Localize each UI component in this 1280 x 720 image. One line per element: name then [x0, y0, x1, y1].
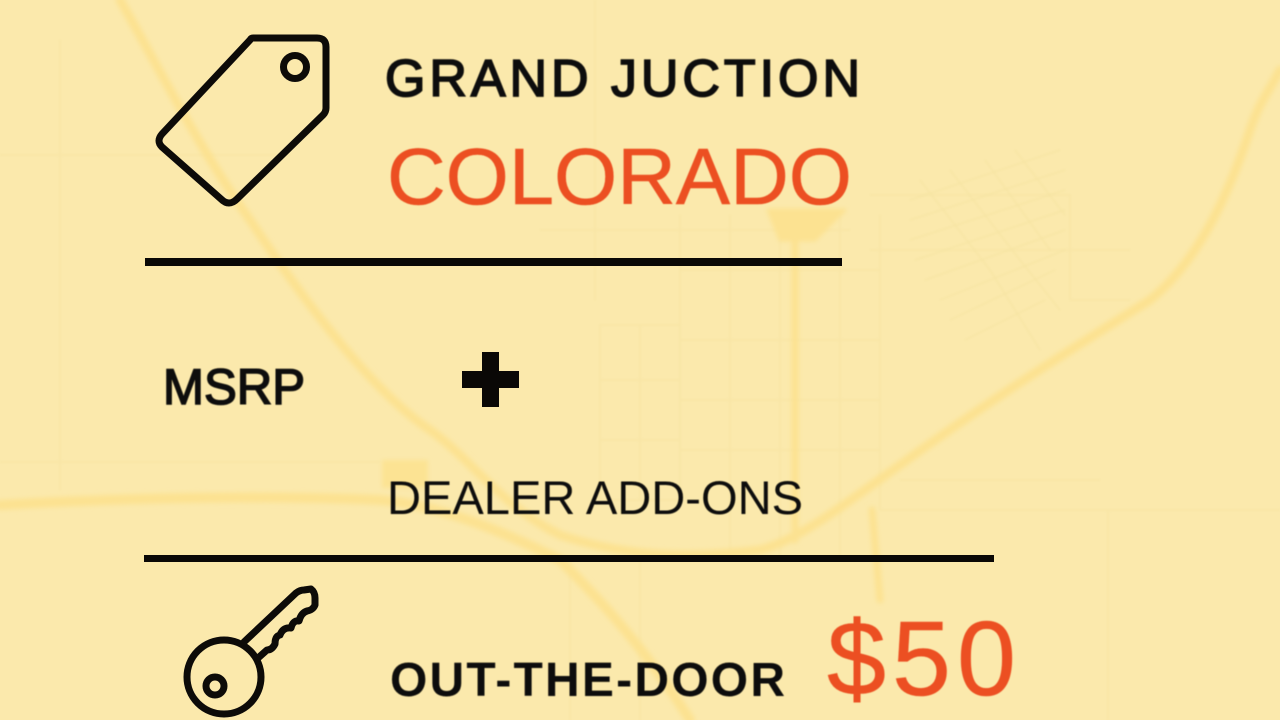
- icon: key: [187, 589, 315, 714]
- icon: plus sign: [462, 352, 519, 407]
- icon: price tag: [159, 38, 326, 203]
- heading: Colorado: COLORADO: [387, 132, 852, 221]
- label: out-the-door: OUT-THE-DOOR: [390, 654, 785, 707]
- price: $50: $50: [827, 600, 1016, 718]
- label: dealer add-ons: DEALER ADD-ONS: [387, 471, 803, 524]
- heading: Grand Juction: GRAND JUCTION: [385, 50, 860, 108]
- divider: upper rule: [145, 258, 842, 266]
- label: MSRP: MSRP: [163, 359, 305, 415]
- divider: lower rule: [144, 555, 994, 562]
